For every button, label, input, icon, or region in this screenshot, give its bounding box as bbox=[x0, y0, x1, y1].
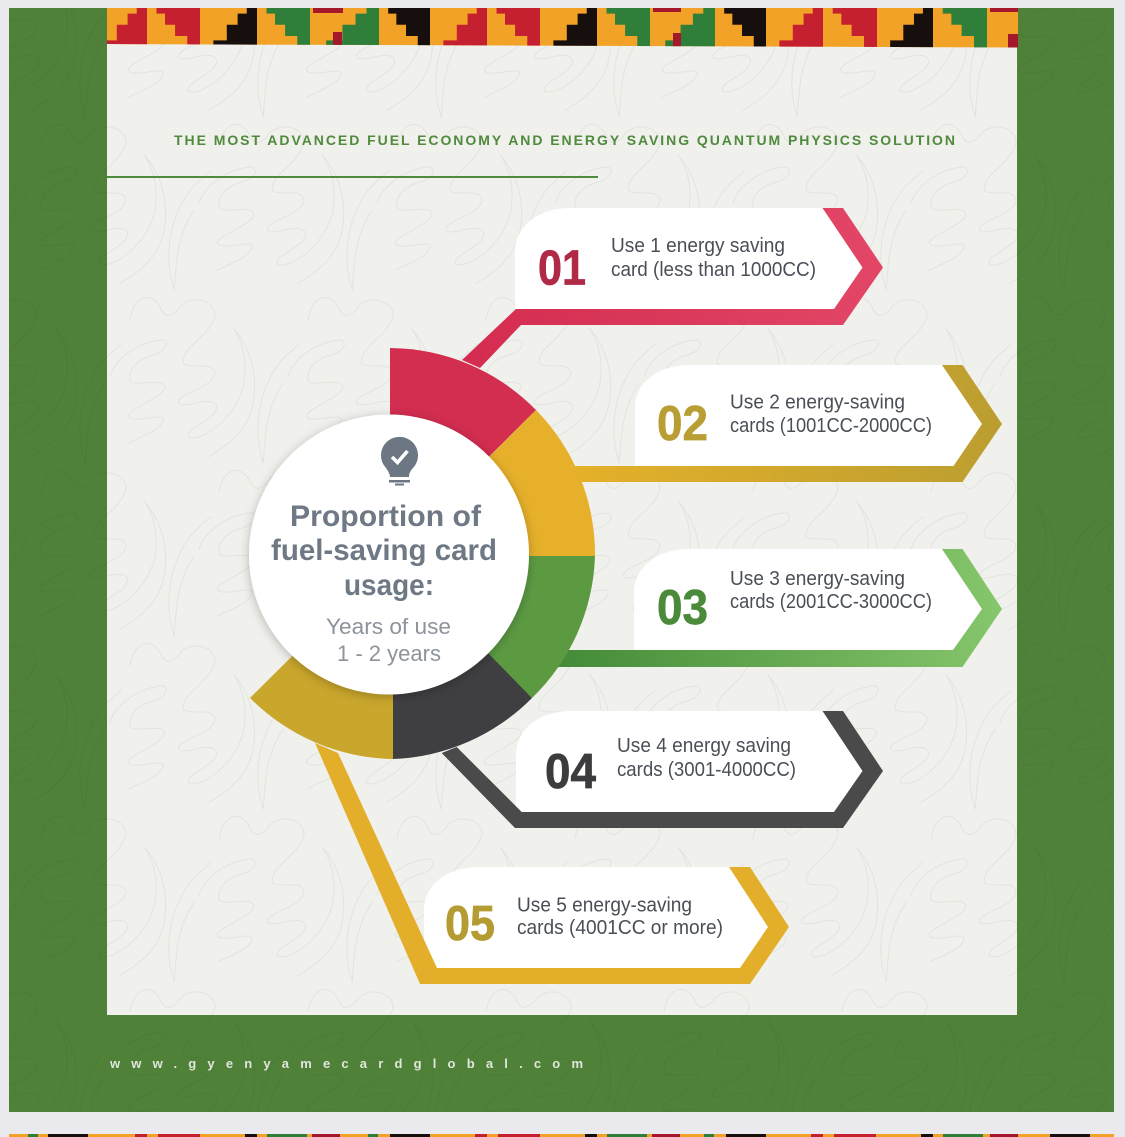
arrow 05 connector bbox=[315, 743, 789, 984]
arrow 03 number: 03 bbox=[657, 581, 708, 635]
centre title bbox=[271, 500, 497, 602]
arrow 05 number: 05 bbox=[445, 897, 495, 951]
arrow 01 bbox=[462, 208, 883, 368]
centre title: usage: bbox=[344, 569, 434, 602]
arrow 03 text bbox=[730, 568, 932, 613]
arrow 05 bbox=[315, 743, 789, 984]
centre subtitle: Years of use bbox=[326, 614, 451, 639]
arrow 01 text: card (less than 1000CC) bbox=[611, 259, 816, 281]
segmented ring chart bbox=[250, 348, 595, 759]
ring segment: gold bbox=[250, 556, 393, 759]
cream content panel bbox=[107, 44, 1017, 1015]
arrow 02 text: cards (1001CC-2000CC) bbox=[730, 415, 932, 437]
arrow 04 text bbox=[617, 735, 796, 781]
arrow 01 connector bbox=[462, 208, 883, 368]
arrow 01 text bbox=[611, 235, 816, 281]
heading: THE MOST ADVANCED FUEL ECONOMY AND ENERGY SAVING QUANTUM PHYSICS SOLUTION bbox=[174, 132, 955, 148]
arrow 03 connector bbox=[550, 549, 1002, 667]
arrow 01 number: 01 bbox=[538, 242, 586, 296]
kente pattern banner bbox=[103, 8, 1018, 48]
icon: light bulb with check bbox=[381, 437, 418, 486]
arrow 05 text: Use 5 energy-saving bbox=[517, 894, 692, 916]
arrow 04 bbox=[442, 711, 883, 828]
ring segment: red bbox=[390, 348, 536, 555]
heading rule bbox=[107, 176, 598, 178]
centre subtitle bbox=[326, 614, 451, 666]
arrow 04 number: 04 bbox=[545, 745, 596, 799]
footer website: www.gyenyamecardglobal.com bbox=[109, 1056, 583, 1071]
arrow 03 bbox=[550, 549, 1002, 667]
arrow 04 label plate bbox=[516, 711, 862, 812]
arrow 05 text: cards (4001CC or more) bbox=[517, 917, 723, 939]
arrow 02 label plate bbox=[635, 365, 982, 466]
ring segment: dark grey bbox=[393, 556, 532, 759]
centre title: fuel-saving card bbox=[271, 534, 497, 567]
arrow 02 text bbox=[730, 392, 932, 437]
arrow 05 text bbox=[517, 894, 723, 939]
arrow 02 number: 02 bbox=[657, 397, 708, 451]
arrow 04 connector bbox=[442, 711, 883, 828]
arrow 05 label plate bbox=[424, 867, 768, 968]
arrow 02 text: Use 2 energy-saving bbox=[730, 392, 905, 414]
centre circle bbox=[249, 414, 529, 694]
arrow 03 text: Use 3 energy-saving bbox=[730, 568, 905, 590]
centre title: Proportion of bbox=[290, 500, 482, 533]
centre subtitle: 1 - 2 years bbox=[337, 641, 441, 666]
arrow 03 text: cards (2001CC-3000CC) bbox=[730, 591, 932, 613]
arrow 04 text: cards (3001-4000CC) bbox=[617, 759, 796, 781]
arrow 01 label plate bbox=[515, 208, 862, 310]
arrow 03 label plate bbox=[634, 549, 982, 650]
arrow 02 bbox=[560, 365, 1002, 482]
ring segment: yellow bbox=[390, 410, 595, 556]
arrow 04 text: Use 4 energy saving bbox=[617, 735, 791, 757]
ring segment: green bbox=[390, 556, 595, 698]
arrow 01 text: Use 1 energy saving bbox=[611, 235, 785, 257]
next page kente strip bbox=[9, 1134, 1114, 1137]
arrow 02 connector bbox=[560, 365, 1002, 482]
